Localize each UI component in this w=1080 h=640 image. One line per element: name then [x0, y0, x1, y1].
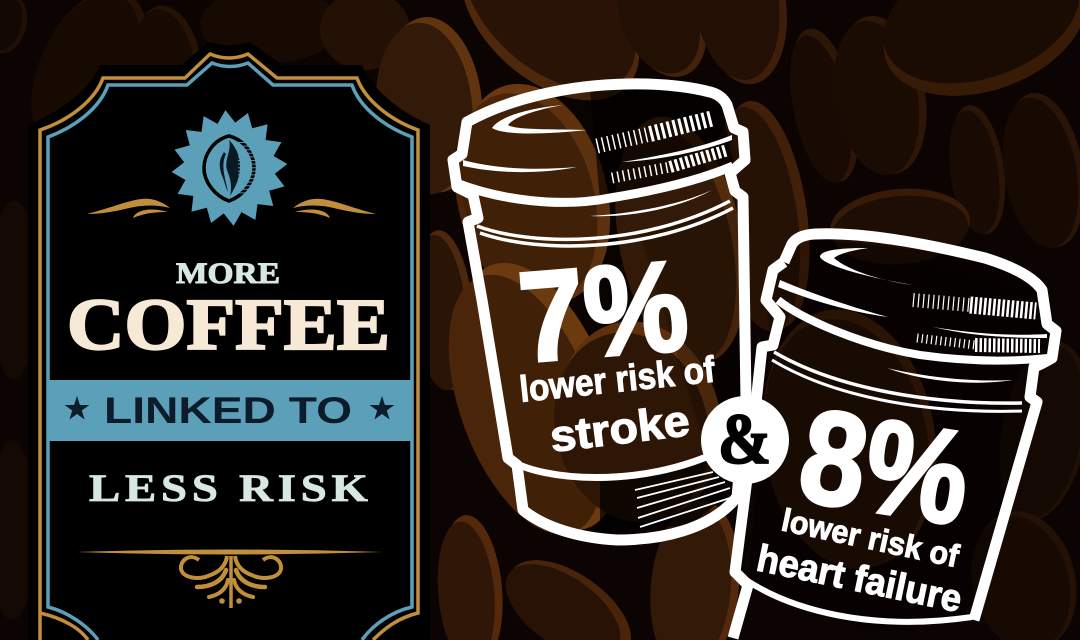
lid hatching — [597, 134, 650, 146]
lid rim highlight — [778, 280, 888, 317]
lid rim band — [778, 300, 1048, 361]
cup bottom band — [743, 578, 972, 622]
lid rim band — [456, 166, 733, 202]
illustration: right coffee cup — [733, 234, 1057, 638]
cup outline — [733, 234, 1056, 638]
text: 7%: 7% — [514, 234, 693, 390]
icon: right star — [370, 396, 394, 420]
cup lower band — [510, 450, 722, 478]
ornament: divider with scrolls — [77, 550, 383, 608]
illustration: left coffee cup — [452, 84, 746, 543]
text: &: & — [718, 399, 771, 479]
cup outline — [453, 84, 746, 540]
lid rim highlight — [463, 160, 577, 172]
banner: linked to — [47, 380, 413, 441]
text: MORE: MORE — [176, 257, 280, 290]
icon: sunburst with coffee bean — [171, 109, 288, 227]
text: lower risk of: lower risk of — [518, 349, 717, 410]
flourish: left — [87, 199, 170, 218]
panel: vintage label sign — [28, 42, 430, 640]
text: LINKED TO: LINKED TO — [104, 390, 352, 431]
text: stroke: stroke — [547, 396, 692, 462]
cup neck lines — [590, 190, 712, 216]
cup shading — [747, 237, 1057, 630]
cup shading — [452, 85, 746, 543]
text: COFFEE: COFFEE — [67, 284, 390, 365]
icon: left star — [65, 396, 89, 420]
cup base fan lines — [635, 472, 733, 527]
badge: ampersand — [701, 396, 789, 484]
lid swirl — [492, 105, 587, 134]
lid swirl — [820, 248, 913, 285]
text: LESS RISK: LESS RISK — [89, 468, 373, 510]
lid hatching — [913, 300, 970, 305]
text: 8%: 8% — [790, 381, 980, 554]
cup neck lines — [887, 368, 1013, 383]
flourish: right — [293, 199, 376, 218]
text: lower risk of: lower risk of — [779, 502, 962, 574]
text: heart failure: heart failure — [753, 538, 965, 621]
